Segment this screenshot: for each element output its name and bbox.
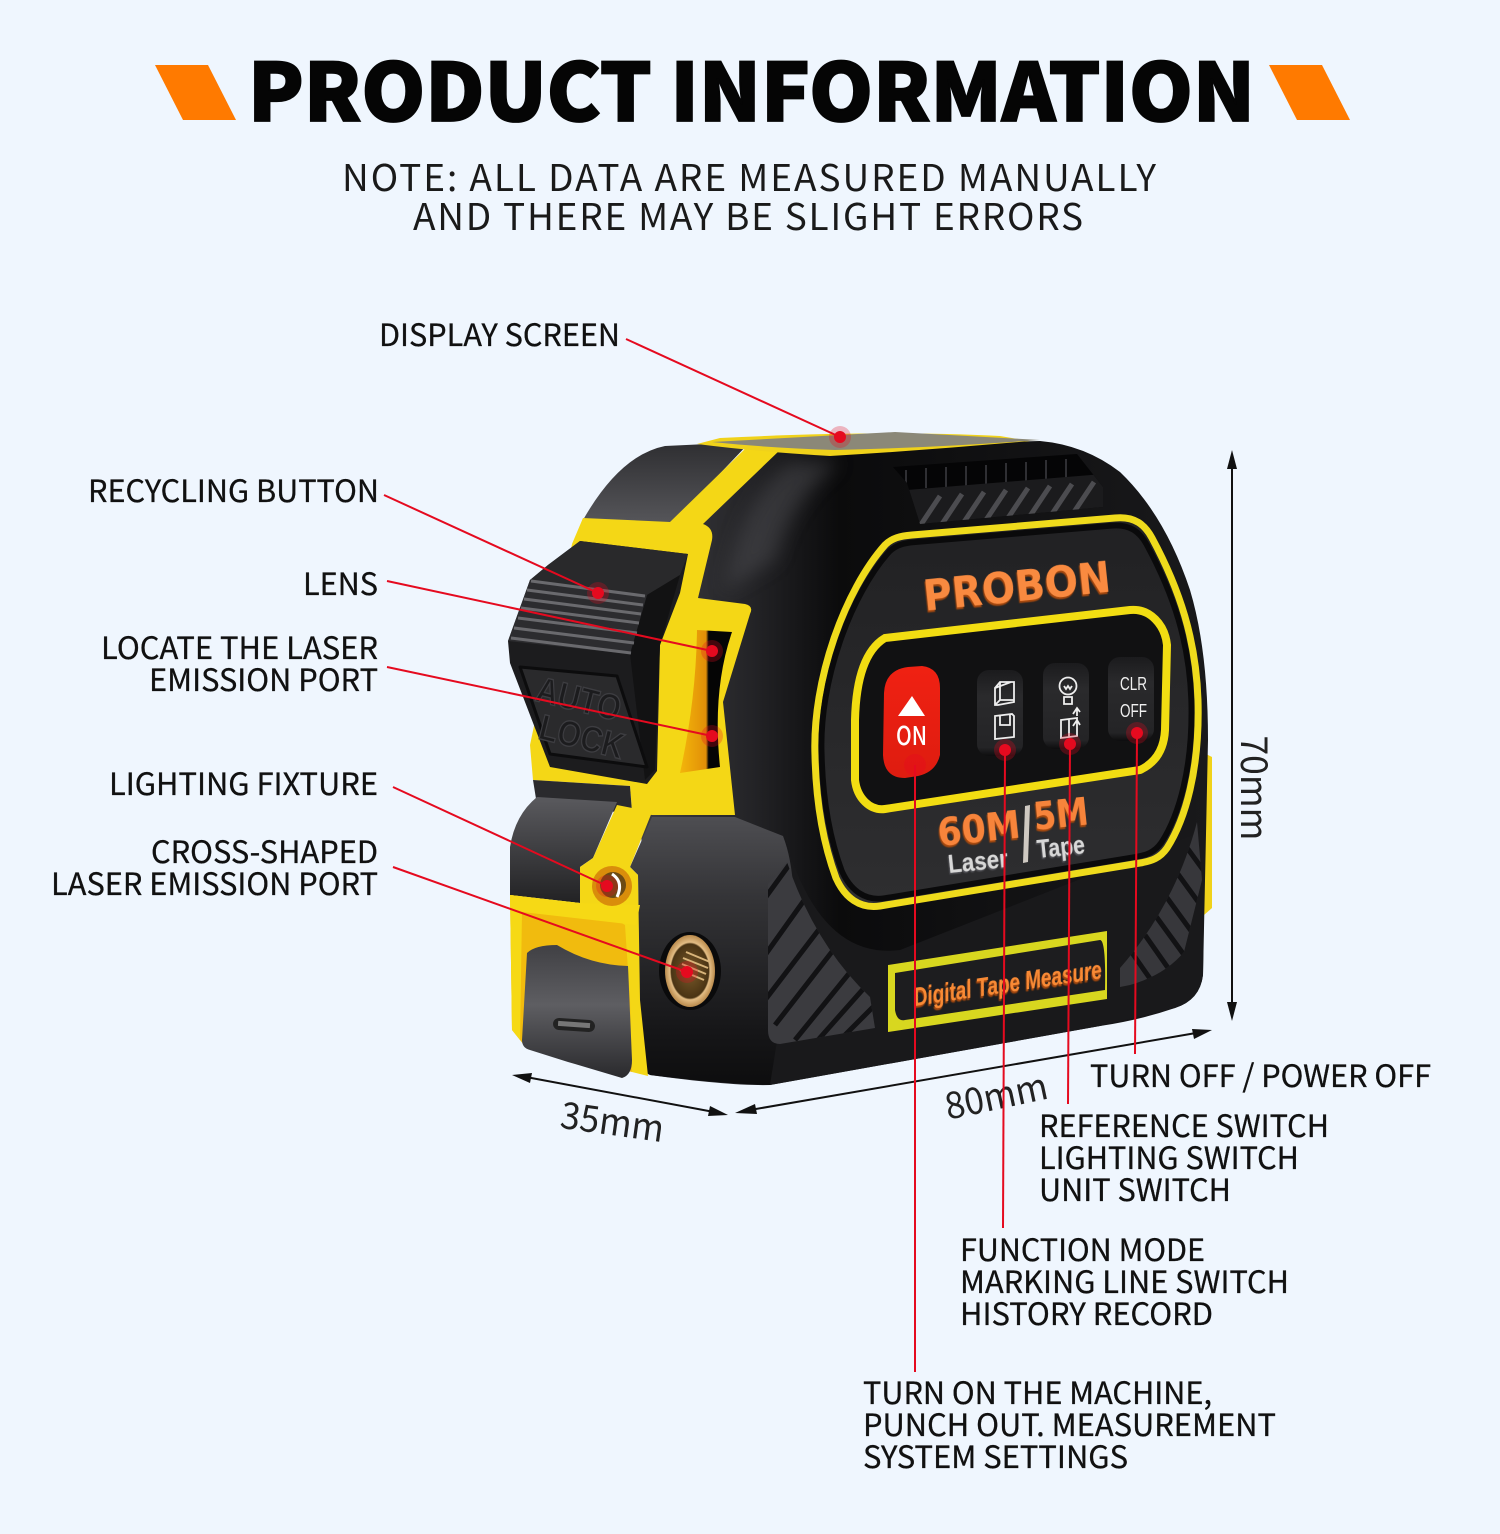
callout: locate the laser emission port xyxy=(101,623,723,747)
callout: recycling button xyxy=(88,466,609,604)
ribs: right grip xyxy=(1120,822,1202,987)
laser window slot xyxy=(680,630,732,773)
on button xyxy=(883,666,940,778)
digital tape measure plate: Digital Tape Measure xyxy=(911,954,1104,1012)
60m spec: 60M xyxy=(935,803,1022,855)
top display screen xyxy=(697,432,1040,456)
button tray xyxy=(855,610,1167,809)
dimension: 70mm height: 70mm xyxy=(1230,736,1284,840)
dimension: 70mm height xyxy=(1227,450,1284,1021)
callout: cross-shaped laser emission port: CROSS-SHAPED xyxy=(151,827,378,872)
callout: turn off power off xyxy=(1090,722,1431,1096)
dimension: 35mm depth: 35mm xyxy=(558,1085,668,1153)
dark strip under lock frame xyxy=(533,780,632,812)
divider bar xyxy=(1023,805,1030,863)
note text xyxy=(342,148,1156,241)
front outer panel xyxy=(815,518,1198,906)
dimension: 80mm width xyxy=(735,1029,1212,1131)
brand logo: PROBON xyxy=(921,553,1113,622)
callout: turn off power off: TURN OFF / POWER OFF xyxy=(1090,1051,1431,1096)
note text: NOTE: ALL DATA ARE MEASURED MANUALLY xyxy=(342,148,1156,202)
lighting fixture lamp xyxy=(592,866,632,906)
note text: AND THERE MAY BE SLIGHT ERRORS xyxy=(413,187,1083,241)
callout: reference lighting unit switch: LIGHTING SWITCH xyxy=(1039,1133,1299,1178)
title xyxy=(155,29,1350,145)
light and unit button xyxy=(1043,663,1089,749)
callout: function mode marking line history: FUNCTION MODE xyxy=(960,1225,1205,1270)
on button: ON xyxy=(896,716,927,753)
callout: reference lighting unit switch xyxy=(1039,733,1329,1210)
callout: locate the laser emission port: EMISSION PORT xyxy=(149,655,378,700)
main body xyxy=(640,441,1208,1085)
tape label: Tape xyxy=(1035,829,1086,864)
lock button xyxy=(508,541,688,784)
upper left dark shell xyxy=(583,442,750,524)
lower front shell xyxy=(740,830,1205,1085)
callout: function mode marking line history: HISTORY RECORD xyxy=(960,1289,1213,1334)
callout: turn on the machine: SYSTEM SETTINGS xyxy=(863,1432,1128,1477)
5m spec: 5M xyxy=(1031,789,1091,839)
digital tape measure plate xyxy=(888,931,1107,1032)
right side yellow strip xyxy=(1204,753,1212,915)
auto lock plate: LOCK xyxy=(535,706,629,767)
yellow column and tape mouth xyxy=(510,805,652,1076)
callout: lighting fixture xyxy=(109,759,618,897)
callout: turn on the machine: PUNCH OUT. MEASUREMENT xyxy=(863,1400,1276,1445)
callout: turn on the machine xyxy=(863,754,1276,1477)
callout: display screen xyxy=(379,310,851,448)
callout: locate the laser emission port: LOCATE THE LASER xyxy=(101,623,378,668)
ribs: left grip xyxy=(768,863,875,1044)
callout: lens: LENS xyxy=(303,559,378,604)
callout: lens xyxy=(303,559,723,662)
icon: left orange parallelogram xyxy=(155,65,236,120)
callout: reference lighting unit switch: REFERENCE SWITCH xyxy=(1039,1101,1329,1146)
auto lock plate: AUTO xyxy=(532,668,626,729)
clr off button: OFF xyxy=(1120,701,1147,721)
heading: product information: PRODUCT INFORMATION xyxy=(248,29,1255,145)
lower left block top xyxy=(510,797,617,903)
icon: right orange parallelogram xyxy=(1269,65,1350,120)
lower right block face xyxy=(630,817,794,1085)
callout: cross-shaped laser emission port: LASER EMISSION PORT xyxy=(51,859,378,904)
dimension: 80mm width: 80mm xyxy=(939,1056,1052,1131)
yellow frame around lock button xyxy=(530,447,780,815)
product illustration: digital tape measure xyxy=(508,432,1225,1085)
callout: recycling button: RECYCLING BUTTON xyxy=(88,466,379,511)
callout: function mode marking line history: MARKING LINE SWITCH xyxy=(960,1257,1289,1302)
callout: turn on the machine: TURN ON THE MACHINE, xyxy=(863,1368,1212,1413)
callout: display screen: DISPLAY SCREEN xyxy=(379,310,620,355)
laser label: Laser xyxy=(946,843,1009,879)
auto lock plate xyxy=(520,667,647,767)
callout: lighting fixture: LIGHTING FIXTURE xyxy=(109,759,378,804)
body side highlight xyxy=(725,462,840,590)
function button xyxy=(977,670,1023,756)
callout: reference lighting unit switch: UNIT SWITCH xyxy=(1039,1165,1231,1210)
callout: function mode marking line history xyxy=(960,739,1289,1334)
vent grille xyxy=(893,454,1103,526)
tape hook xyxy=(522,945,632,1078)
clr off button xyxy=(1108,657,1154,741)
dimension: 35mm depth xyxy=(512,1073,728,1153)
threaded mount hole xyxy=(659,932,721,1010)
clr off button: CLR xyxy=(1120,674,1147,694)
callout: cross-shaped laser emission port xyxy=(51,827,698,983)
